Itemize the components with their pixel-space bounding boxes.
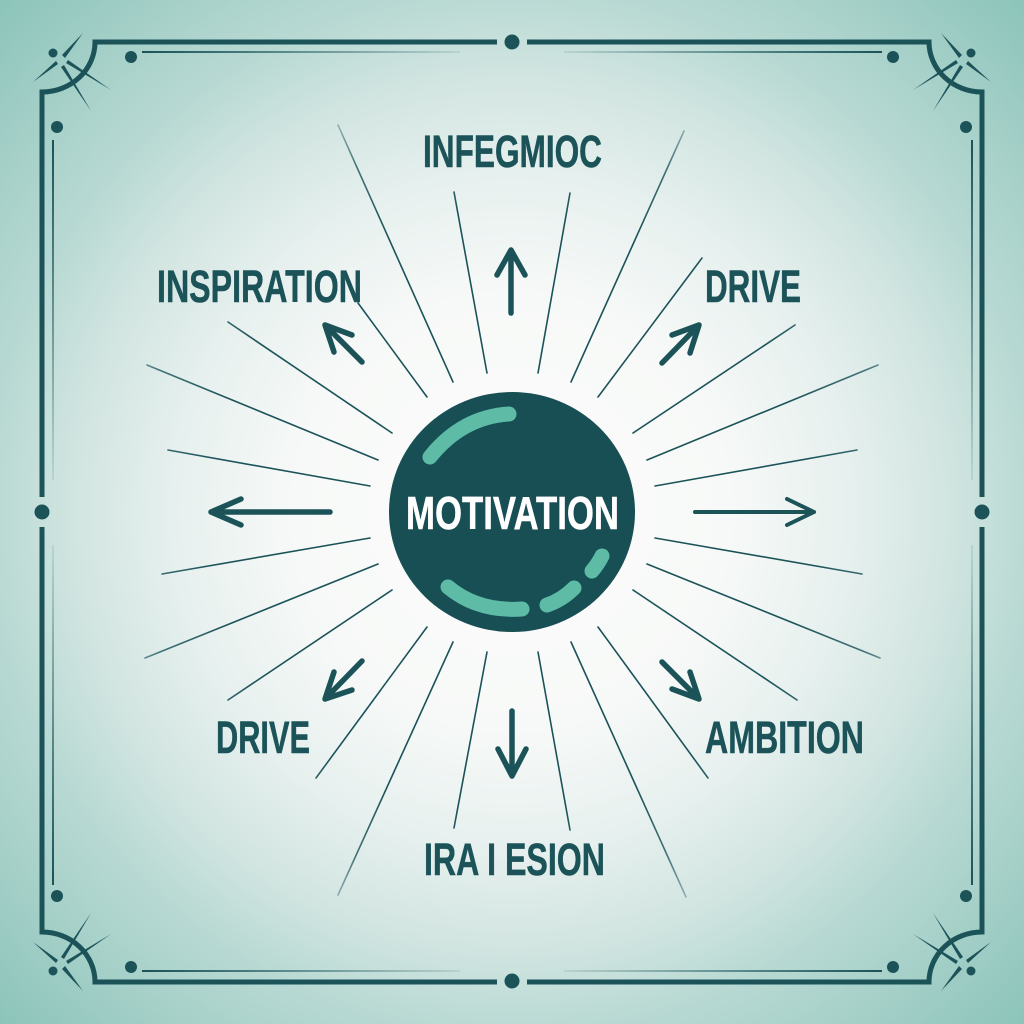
label: bottom: IRA I ESION [424, 834, 605, 885]
arrow: up-right [662, 325, 699, 363]
circle title: MOTIVATION [406, 487, 619, 539]
label: ambition: AMBITION [705, 712, 864, 763]
central circle [389, 392, 635, 632]
arrows [211, 250, 814, 776]
arrow: down [498, 711, 526, 776]
labels [157, 126, 864, 885]
circle highlights [430, 414, 602, 609]
label: drive top right: DRIVE [705, 261, 801, 312]
radiating lines [145, 125, 880, 897]
arrow: left [211, 499, 330, 525]
label: drive bottom left: DRIVE [216, 712, 310, 763]
arrow: up-left [325, 325, 362, 362]
label: inspiration: INSPIRATION [157, 261, 362, 312]
label: top: INFEGMIOC [423, 126, 602, 177]
arrow: down-left [325, 661, 362, 699]
arrow: down-right [662, 662, 699, 699]
arrow: right [695, 499, 814, 525]
arrow: up [497, 250, 525, 313]
